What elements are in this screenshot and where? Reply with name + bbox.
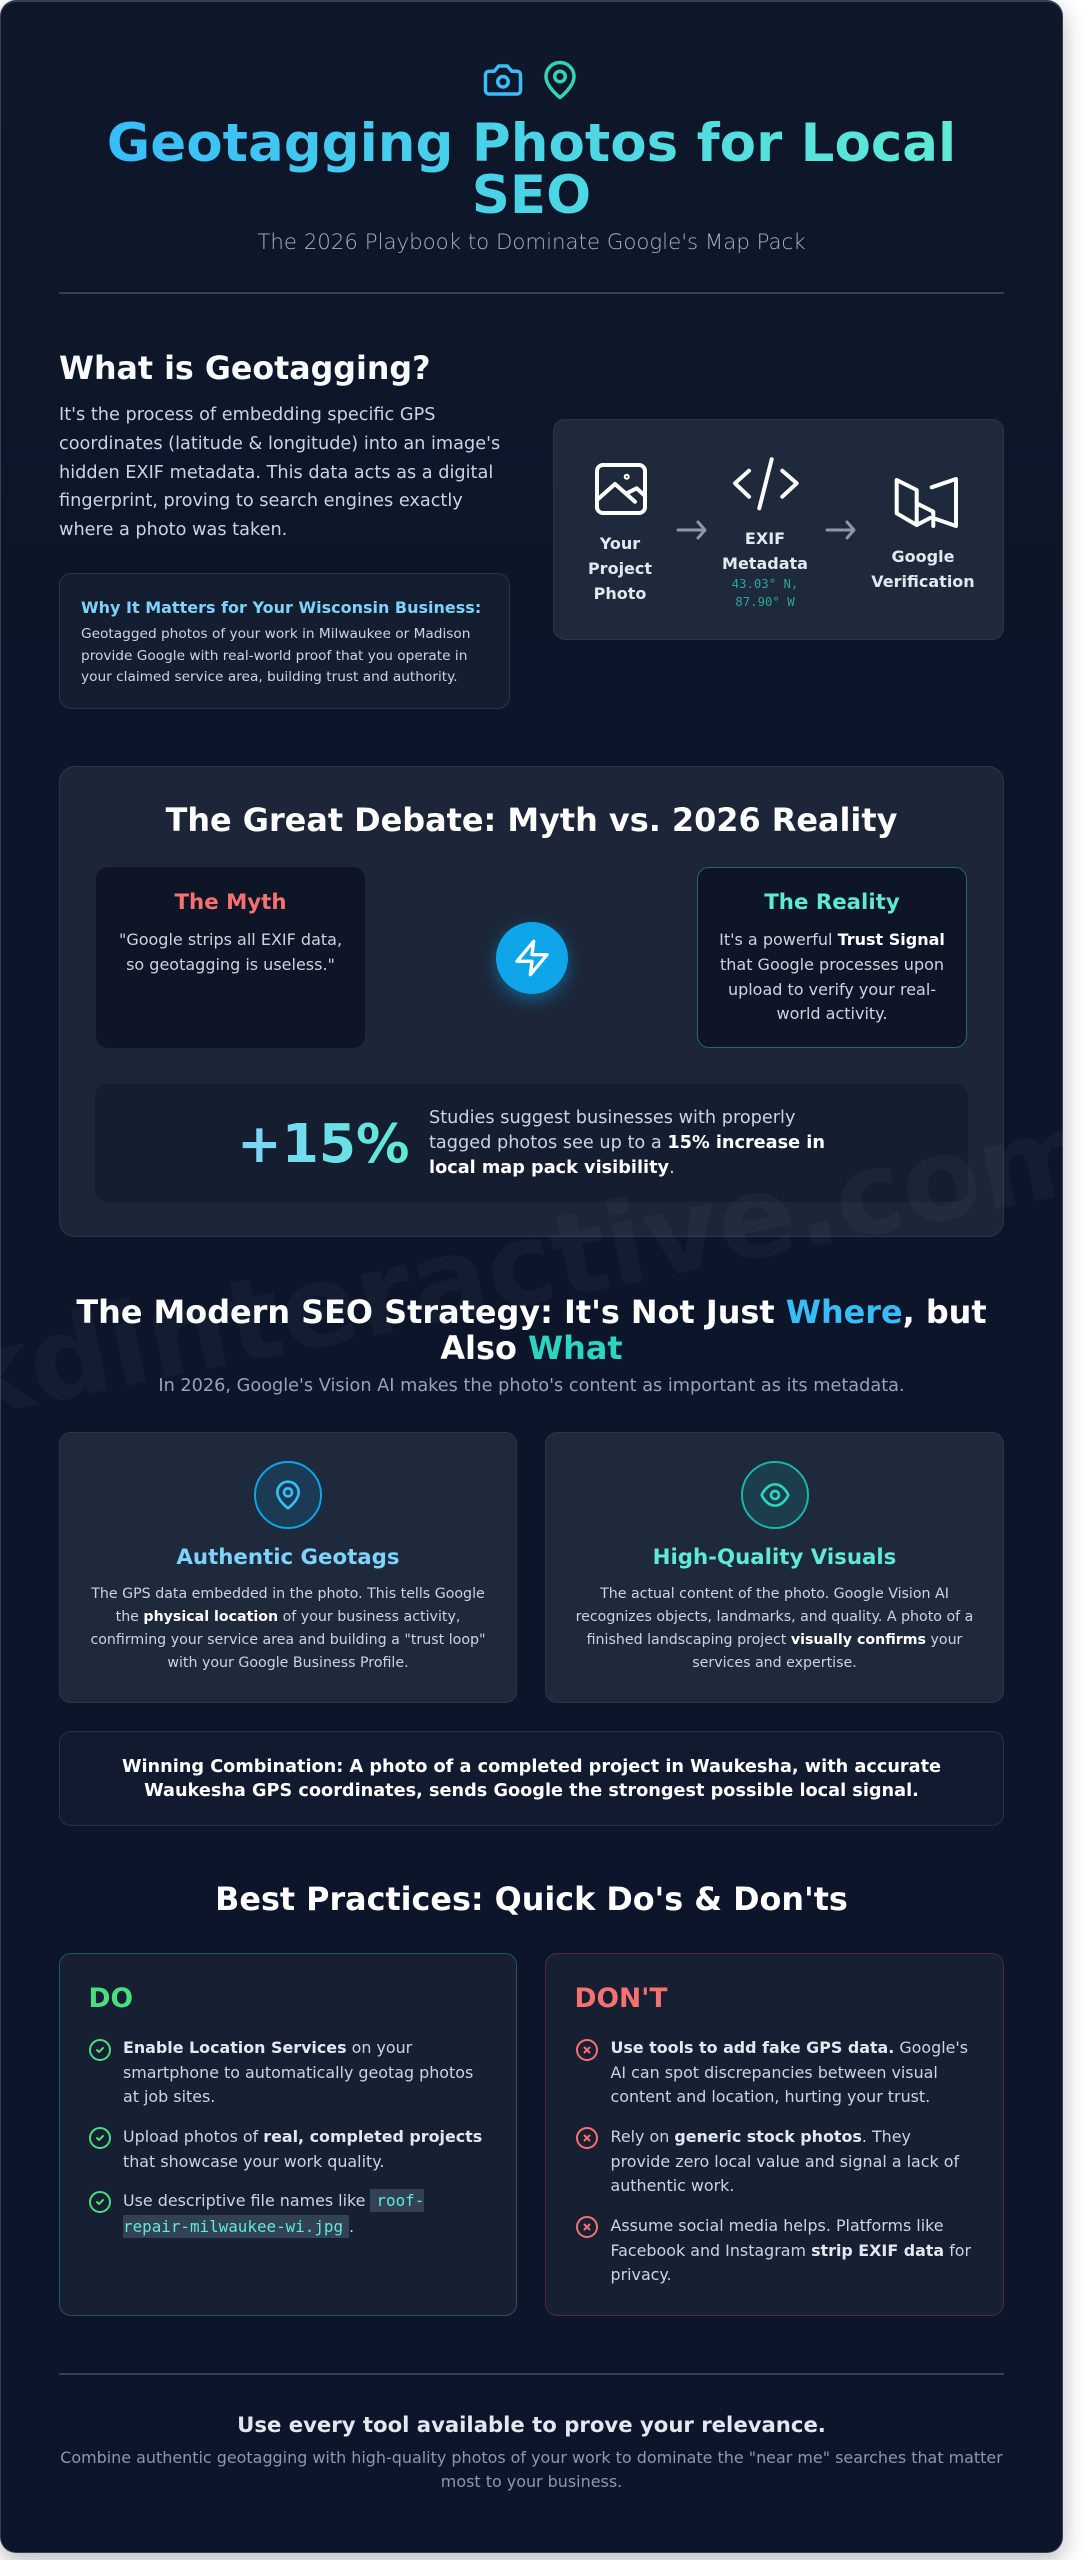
label: your project photo: Photo [594,584,646,603]
callout text: your claimed service area, building trust and authority. [81,669,458,685]
callout text: provide Google with real-world proof that you operate in [81,648,467,664]
myth text [119,930,342,974]
do item 3 [123,2189,424,2238]
panel: great debate [59,766,1004,1237]
don't item 2: provide zero local value and signal a lack of [610,2152,959,2171]
panel: exif flow diagram [553,419,1004,640]
footer divider [59,2373,1004,2375]
title: Geotagging Photos for Local [107,112,956,174]
don't item 2: Rely on generic stock photos. They [610,2127,911,2146]
panel: high-quality visuals [545,1432,1004,1703]
callout text [81,626,470,685]
text: geotagging definition [59,405,500,540]
stat text [429,1108,825,1178]
label: your project photo: Your [600,534,640,553]
card text [576,1586,973,1671]
myth heading: The Myth [175,890,286,915]
footer text [60,2448,1003,2491]
don't item 3: Facebook and Instagram strip EXIF data for [610,2241,971,2260]
label: sample coordinates: 87.90° W [735,595,795,609]
text: strategy subtitle: In 2026, Google's Vision AI makes the photo's content as important as its metadata. [158,1376,905,1396]
stat text: local map pack visibility. [429,1158,675,1178]
subtitle: The 2026 Playbook to Dominate Google's Map Pack [257,230,806,255]
heading: best practices: Best Practices: Quick Do's & Don'ts [215,1881,848,1918]
callout heading: Why It Matters for Your Wisconsin Business: [81,598,481,617]
don't item 2: authentic work. [610,2176,734,2195]
arrow 2 [826,520,856,540]
panel: statistic [95,1084,968,1202]
footer text: Combine authentic geotagging with high-quality photos of your work to dominate the "near me" searches that matter [60,2448,1003,2467]
card title: High-Quality Visuals [653,1545,896,1570]
card text [90,1586,486,1671]
icon: code [732,457,799,510]
don't item 1: content and location, hurting your trust. [610,2087,930,2106]
text: geotagging definition: fingerprint, proving to search engines exactly [59,491,463,511]
panel: authentic geotags [59,1432,517,1703]
myth text: so geotagging is useless." [126,955,335,974]
label: your project photo: Project [588,559,652,578]
card title: Authentic Geotags [176,1545,400,1570]
label: google verification: Google [892,547,954,566]
label: sample coordinates [732,577,798,609]
card text: The GPS data embedded in the photo. This tells Google [91,1586,485,1602]
text: geotagging definition: It's the process of embedding specific GPS [59,405,435,425]
icon: x 3 [576,2216,598,2238]
do item 2: that showcase your work quality. [123,2152,384,2171]
label: google verification: Verification [871,572,975,591]
reality text: that Google processes upon [720,955,944,974]
do heading: DO [88,1983,133,2014]
do item 1: Enable Location Services on your [123,2038,412,2057]
do item 3: Use descriptive file names like roof- [123,2191,424,2210]
do item 1: at job sites. [123,2087,215,2106]
panel: do list [59,1953,517,2316]
icon: check 2 [89,2127,111,2149]
icon: eye badge [741,1461,809,1529]
header divider [59,292,1004,294]
winning text [122,1756,941,1801]
do item 2: Upload photos of real, completed projects [123,2127,482,2146]
reality text [719,930,945,1023]
icon: x 1 [576,2039,598,2061]
title [107,112,956,226]
icon: map [894,477,958,528]
icon: camera [484,64,522,96]
text: geotagging definition: where a photo was taken. [59,520,287,540]
reality text: It's a powerful Trust Signal [719,930,945,949]
don't item 3 [610,2216,972,2284]
don't item 1 [610,2038,968,2106]
winning text: Waukesha GPS coordinates, sends Google the strongest possible local signal. [144,1781,919,1801]
text: geotagging definition: hidden EXIF metadata. This data acts as a digital [59,463,493,483]
heading: great debate: The Great Debate: Myth vs. 2026 Reality [166,801,897,839]
do item 1: smartphone to automatically geotag photos [123,2063,473,2082]
icon: check 3 [89,2191,111,2213]
card text: with your Google Business Profile. [167,1655,409,1671]
icon: check 1 [89,2039,111,2061]
label: exif metadata: EXIF [745,529,785,548]
text: geotagging definition: coordinates (latitude & longitude) into an image's [59,434,500,454]
winning text: Winning Combination: A photo of a completed project in Waukesha, with accurate [122,1756,941,1776]
icon: x 2 [576,2127,598,2149]
label: exif metadata [722,529,808,573]
don't item 1: AI can spot discrepancies between visual [610,2063,938,2082]
callout text: Geotagged photos of your work in Milwaukee or Madison [81,626,470,642]
do item 3: repair-milwaukee-wi.jpg . [123,2217,354,2236]
don't item 3: Assume social media helps. Platforms like [610,2216,944,2235]
don't heading: DON'T [574,1983,667,2014]
heading: modern seo strategy: The Modern SEO Strategy: It's Not Just Where, but [76,1293,987,1331]
stat text: Studies suggest businesses with properly [429,1108,795,1128]
reality text: world activity. [777,1004,887,1023]
don't item 2 [610,2127,960,2195]
icon: map pin [544,60,576,100]
card text: finished landscaping project visually confirms your [587,1632,962,1648]
stat text: tagged photos see up to a 15% increase in [429,1133,825,1153]
heading: modern seo strategy [76,1293,987,1367]
label: your project photo [588,534,652,603]
icon: photo [594,463,647,515]
do item 1 [123,2038,473,2106]
card text: services and expertise. [692,1655,857,1671]
stat number: +15% [237,1112,410,1175]
panel: why it matters callout [59,573,510,709]
icon: pin badge [254,1461,322,1529]
reality heading: The Reality [764,890,900,915]
card text: The actual content of the photo. Google Vision AI [600,1586,949,1602]
heading: modern seo strategy: Also What [440,1329,623,1367]
icon: lightning badge [496,922,568,994]
footer heading: Use every tool available to prove your relevance. [237,2412,826,2437]
reality text: upload to verify your real- [728,980,936,999]
card text: confirming your service area and building a "trust loop" [90,1632,486,1648]
don't item 3: privacy. [610,2265,672,2284]
label: google verification [871,547,975,591]
label: sample coordinates: 43.03° N, [732,577,798,591]
arrow 1 [676,520,706,540]
header icons [484,60,576,100]
card text: the physical location of your business activity, [116,1609,460,1625]
do item 2 [123,2127,482,2171]
heading: what is geotagging: What is Geotagging? [59,351,430,387]
panel: the myth [96,867,365,1048]
myth text: "Google strips all EXIF data, [119,930,342,949]
panel: don't list [545,1953,1004,2316]
card text: recognizes objects, landmarks, and quality. A photo of a [576,1609,973,1625]
callout: winning combination [59,1731,1004,1826]
label: exif metadata: Metadata [722,554,808,573]
panel: the reality [697,867,967,1048]
title: SEO [472,165,591,226]
don't item 1: Use tools to add fake GPS data. Google's [610,2038,968,2057]
footer text: most to your business. [441,2472,622,2491]
